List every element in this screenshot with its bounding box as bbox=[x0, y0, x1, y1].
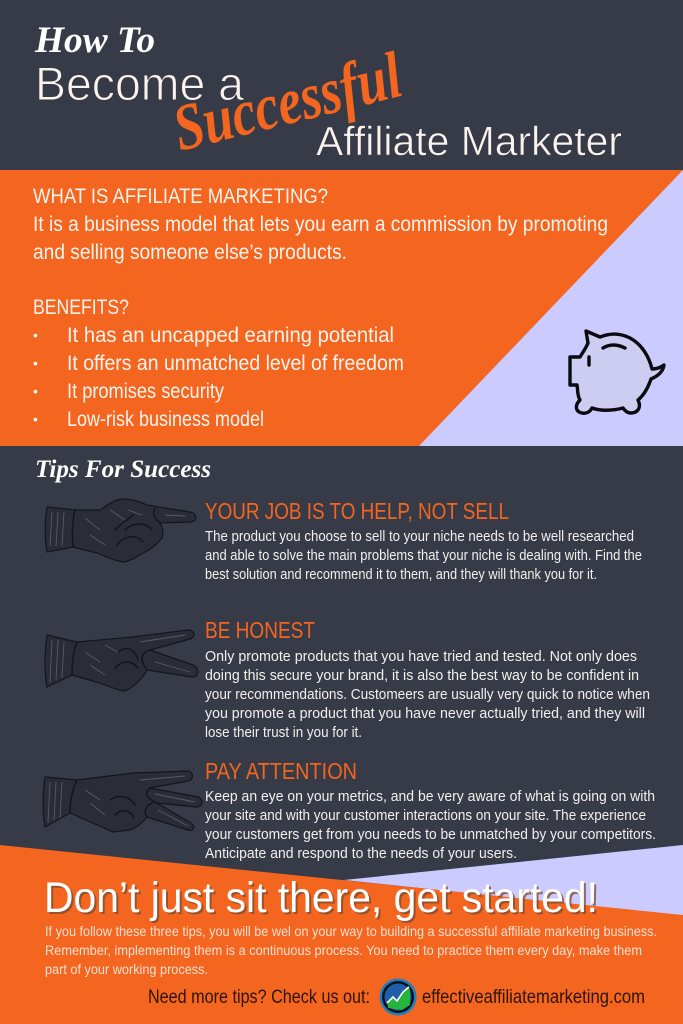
icon: piggy bank bbox=[570, 331, 664, 413]
closing paragraph: Remember, implementing them is a continuous process. You need to practice them every day, make them bbox=[45, 942, 642, 958]
orange footer shape bbox=[0, 845, 683, 1024]
definition text: and selling someone else’s products. bbox=[33, 241, 347, 264]
lavender wedge bbox=[344, 845, 683, 916]
tip 2: be honest bbox=[45, 617, 650, 741]
closing paragraph bbox=[45, 923, 657, 977]
tip 3 body: Keep an eye on your metrics, and be very aware of what is going on with bbox=[205, 789, 655, 805]
benefits list: • bbox=[33, 411, 38, 427]
tip 2 body: Only promote products that you have tried and tested. Not only does bbox=[205, 649, 637, 665]
tip 1 body: and able to solve the main problems that your niche is dealing with. Find the bbox=[205, 548, 642, 564]
heading: tips for success: Tips For Success bbox=[35, 456, 211, 483]
tip 1 body: best solution and recommend it to them, and they will thank you for it. bbox=[205, 567, 597, 583]
title line: Affiliate Marketer: Affiliate Marketer bbox=[316, 118, 622, 164]
heading shadow and text: get started: Don’t just sit there, get started! bbox=[46, 876, 600, 924]
tip 3 body bbox=[205, 789, 656, 862]
closing paragraph: part of your working process. bbox=[45, 961, 208, 977]
definition text bbox=[33, 213, 608, 264]
icon: hand showing three fingers bbox=[43, 771, 202, 832]
title word: Successful: Successful bbox=[166, 38, 409, 166]
benefits list: Low-risk business model bbox=[67, 408, 264, 431]
benefits list: It offers an unmatched level of freedom bbox=[67, 352, 404, 375]
benefits list: • bbox=[33, 327, 38, 343]
heading: what is affiliate marketing: WHAT IS AFFILIATE MARKETING? bbox=[33, 185, 328, 208]
title line: Become a: Become a bbox=[35, 57, 245, 110]
definition text: It is a business model that lets you earn a commission by promoting bbox=[33, 213, 608, 236]
tip 1 body: The product you choose to sell to your niche needs to be well researched bbox=[205, 529, 634, 545]
tip 2 body: doing this secure your brand, it is also the best way to be confident in bbox=[205, 668, 639, 684]
lavender triangle bbox=[419, 170, 683, 446]
icon: hand pointing one finger bbox=[45, 499, 196, 562]
benefits list: It promises security bbox=[67, 380, 224, 403]
title bbox=[34, 20, 622, 166]
call to action label: Need more tips? Check us out: bbox=[148, 987, 370, 1008]
tip 3 body: your customers get from you needs to be unmatched by your competitors. bbox=[205, 827, 656, 843]
tip 1: your job is to help bbox=[45, 498, 642, 583]
tip 1 heading: YOUR JOB IS TO HELP, NOT SELL bbox=[205, 498, 509, 524]
tip 2 body: lose their trust in you for it. bbox=[205, 725, 362, 741]
heading: benefits: BENEFITS? bbox=[33, 296, 129, 319]
benefits list: It has an uncapped earning potential bbox=[67, 324, 394, 347]
panel: call to action bbox=[0, 845, 683, 1024]
tip 3: pay attention bbox=[43, 758, 656, 862]
tip 3 body: your site and with your customer interactions on your site. The experience bbox=[205, 808, 646, 824]
tip 3 heading: PAY ATTENTION bbox=[205, 758, 357, 784]
tip 1 body bbox=[205, 529, 642, 583]
heading shadow and text: get started: Don’t just sit there, get started! bbox=[44, 874, 598, 922]
benefits list: • bbox=[33, 383, 38, 399]
tip 3 body: Anticipate and respond to the needs of your users. bbox=[205, 846, 517, 862]
tip 2 heading: BE HONEST bbox=[205, 617, 315, 643]
orange band bbox=[0, 170, 683, 446]
title line: How To: How To bbox=[34, 20, 155, 61]
tip 2 body: you promote a product that you have never actually tried, and they will bbox=[205, 706, 645, 722]
panel: what is affiliate marketing bbox=[0, 170, 683, 446]
icon: hand showing two fingers bbox=[45, 630, 198, 691]
icon: logo with growth chart bbox=[380, 978, 416, 1016]
benefits list bbox=[33, 324, 404, 431]
benefits list: • bbox=[33, 355, 38, 371]
tip 2 body: your recommendations. Customeers are usually very quick to notice when bbox=[205, 687, 650, 703]
website address: effectiveaffiliatemarketing.com bbox=[422, 987, 645, 1008]
tip 2 body bbox=[205, 649, 650, 741]
